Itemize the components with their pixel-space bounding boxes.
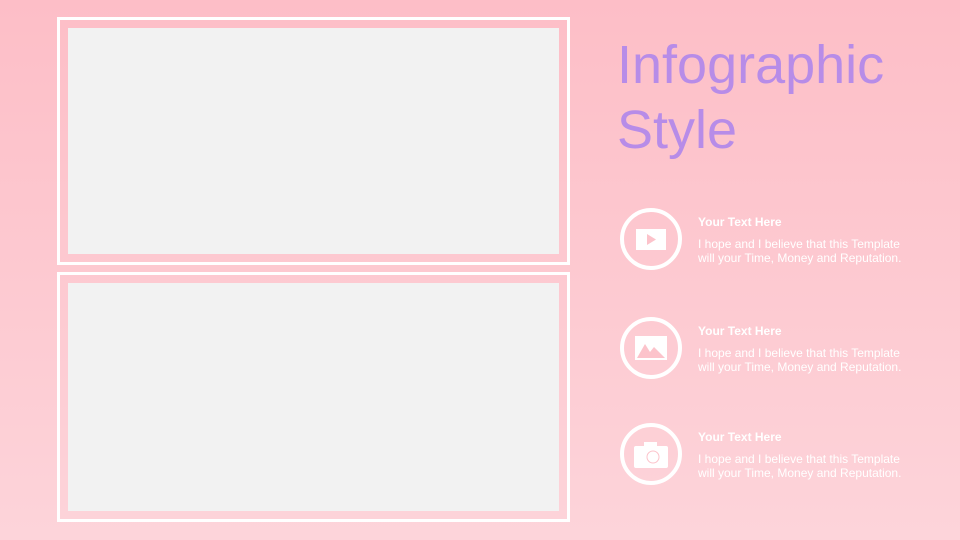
text block 2: Your Text Here — [698, 324, 782, 338]
text block 1: I hope and I believe that this Template — [698, 237, 900, 251]
icon: camera — [620, 423, 682, 485]
text block 1 — [698, 215, 901, 265]
text block 2: I hope and I believe that this Template — [698, 346, 900, 360]
title: Style — [617, 100, 737, 160]
icon: image — [620, 317, 682, 379]
title: Infographic — [617, 35, 884, 95]
text block 1: Your Text Here — [698, 215, 782, 229]
text block 3: will your Time, Money and Reputation. — [698, 466, 901, 480]
text block 2 — [698, 324, 901, 374]
text block 3: I hope and I believe that this Template — [698, 452, 900, 466]
panel: bottom image frame — [57, 272, 570, 522]
text block 3 — [698, 430, 901, 480]
title — [617, 35, 884, 160]
text block 3: Your Text Here — [698, 430, 782, 444]
text block 2: will your Time, Money and Reputation. — [698, 360, 901, 374]
panel: top image frame — [57, 17, 570, 265]
text block 1: will your Time, Money and Reputation. — [698, 251, 901, 265]
icon: video — [620, 208, 682, 270]
